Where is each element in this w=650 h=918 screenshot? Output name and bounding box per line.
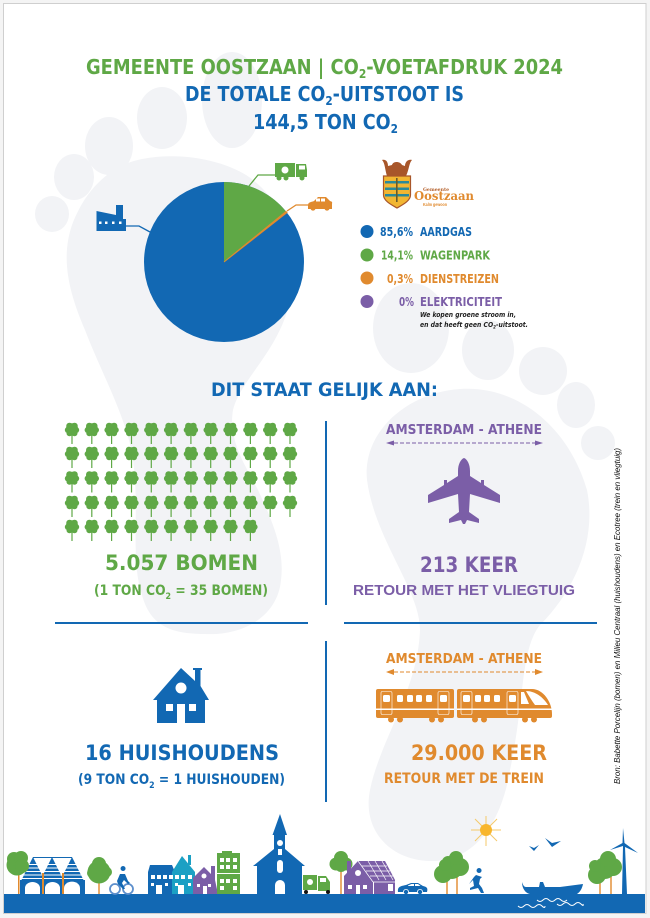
trees value: 5.057 BOMEN [105, 551, 258, 576]
legend note [420, 311, 528, 330]
wind turbine [610, 828, 638, 894]
route arrow [386, 669, 543, 675]
legend note: en dat heeft geen CO [420, 321, 502, 329]
ground bar [4, 894, 645, 913]
train note: RETOUR MET DE TREIN [384, 771, 544, 787]
route label: AMSTERDAM - ATHENE [386, 422, 542, 438]
icon: airplane [428, 458, 500, 524]
title line 3: 2 [391, 122, 398, 136]
title line 1: 2 [359, 67, 366, 81]
panel: train [376, 651, 552, 787]
recycling truck [303, 875, 330, 894]
trees [588, 851, 622, 894]
trees note: = 35 BOMEN) [171, 583, 268, 599]
logo tagline: Kalm gewoon [423, 202, 447, 207]
icon: recycling truck [275, 163, 307, 180]
legend: dienstreizen [360, 271, 499, 286]
trees [434, 851, 469, 894]
title block [86, 55, 563, 136]
sun [471, 816, 501, 846]
legend: dienstreizen: DIENSTREIZEN [420, 271, 499, 286]
panel: trees [65, 423, 297, 602]
icon: car [308, 197, 332, 211]
market hall [18, 857, 85, 894]
crown [382, 160, 412, 176]
title line 1: GEMEENTE OOSTZAAN | CO [86, 55, 391, 79]
left footprint watermark [35, 52, 293, 634]
waves [518, 898, 583, 908]
panel: household [78, 668, 285, 791]
car [398, 883, 427, 894]
tree [6, 851, 29, 876]
pie chart [144, 182, 304, 342]
legend [360, 224, 502, 309]
heading: equivalents: DIT STAAT GELIJK AAN: [211, 380, 438, 401]
legend: elektriciteit [360, 294, 502, 309]
tree in shield [396, 178, 398, 202]
icon: house [153, 668, 209, 723]
legend: wagenpark: WAGENPARK [420, 248, 491, 262]
boat [522, 882, 583, 894]
logo text: Gemeente [423, 187, 449, 193]
title line 3: 144,5 TON CO [253, 110, 409, 134]
legend note: 2 [493, 324, 496, 330]
household value: 16 HUISHOUDENS [85, 741, 279, 766]
trees note: (1 TON CO [94, 583, 175, 599]
shield [384, 176, 410, 208]
legend: wagenpark [360, 248, 491, 262]
legend: aardgas: AARDGAS [420, 224, 472, 239]
tree [330, 851, 352, 894]
birds [529, 838, 561, 851]
title line 2: DE TOTALE CO [185, 82, 346, 106]
route label: AMSTERDAM - ATHENE [386, 651, 542, 667]
title line 2: -UITSTOOT IS [333, 82, 464, 106]
plane note: RETOUR MET HET VLIEGTUIG [353, 582, 575, 599]
panel: plane [353, 422, 575, 599]
legend: elektriciteit: 0% [399, 294, 414, 309]
shield stripes [385, 181, 409, 196]
trees note: 2 [166, 592, 171, 602]
plane value: 213 KEER [420, 553, 518, 578]
legend: elektriciteit: ELEKTRICITEIT [420, 294, 502, 309]
legend: dienstreizen: 0,3% [387, 271, 413, 286]
right footprint watermark [367, 283, 615, 861]
logo name: Oostzaan [414, 189, 474, 203]
legend: wagenpark: 14,1% [381, 248, 413, 262]
skyline [4, 814, 645, 913]
solar house [344, 861, 395, 894]
household note: = 1 HUISHOUDEN) [155, 772, 285, 788]
leader lines [125, 175, 308, 232]
source note: Bron: Babette Porcelijn (bomen) en Milieu Centraal (huishoudens) en Ecotree (trein en vliegtuig) [612, 448, 622, 784]
tree grid [65, 423, 297, 541]
factory windows [99, 222, 122, 224]
household note: (9 TON CO [78, 772, 159, 788]
cyclist [110, 866, 133, 894]
tree [87, 857, 112, 894]
church [253, 814, 305, 894]
title line 1: -VOETAFDRUK 2024 [366, 55, 563, 79]
household note: 2 [149, 781, 155, 791]
logo: Gemeente Oostzaan [382, 160, 474, 208]
dividers [55, 421, 597, 802]
title line 2: 2 [325, 94, 333, 108]
legend note: -uitstoot. [496, 321, 528, 329]
runner [469, 868, 484, 893]
legend: aardgas [360, 224, 472, 239]
legend note: We kopen groene stroom in, [420, 311, 516, 319]
route arrow [386, 440, 543, 446]
train value: 29.000 KEER [411, 741, 547, 766]
icon: factory [96, 205, 126, 231]
legend: aardgas: 85,6% [380, 224, 413, 239]
icon: train [376, 689, 552, 722]
row houses [148, 851, 240, 894]
